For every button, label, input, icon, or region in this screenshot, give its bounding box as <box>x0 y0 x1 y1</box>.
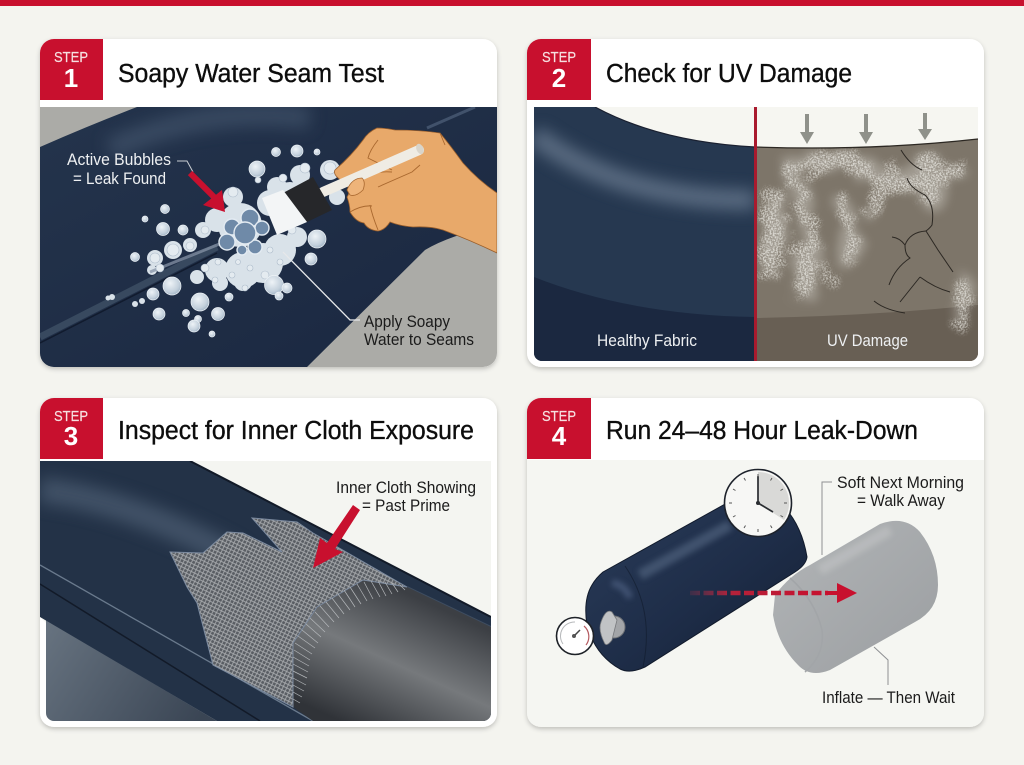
step 3 badge: 3 <box>64 421 78 451</box>
inflated blue cylinder <box>586 495 807 671</box>
label: healthy fabric: Healthy Fabric <box>597 332 697 350</box>
callout: apply soapy water <box>364 313 474 349</box>
red divider <box>754 107 757 361</box>
panel: step 2 uv damage <box>527 39 984 367</box>
callout: active bubbles: Active Bubbles <box>67 151 171 169</box>
label: uv damage: UV Damage <box>827 332 908 350</box>
callout: soft next morning: Soft Next Morning <box>837 474 964 492</box>
step 4 badge <box>527 398 591 459</box>
healthy fabric swatch <box>534 107 755 361</box>
valve <box>600 611 625 645</box>
heading step 4: Run 24–48 Hour Leak-Down <box>606 417 918 445</box>
soft faded cylinder <box>773 521 938 673</box>
exposed inner tube <box>293 580 491 721</box>
callout: apply soapy water: Apply Soapy <box>364 313 451 331</box>
red arrow to cloth <box>313 505 360 568</box>
leader lines <box>822 482 888 685</box>
callout: inner cloth showing: = Past Prime <box>362 497 450 515</box>
pressure gauge <box>556 618 594 654</box>
panel: step 4 leak-down <box>527 398 984 727</box>
top accent bar <box>0 0 1024 6</box>
step 3 badge <box>40 398 103 459</box>
clock <box>724 470 792 536</box>
step 3 badge: STEP <box>54 409 88 425</box>
panel: step 1 soapy water seam test <box>40 39 497 367</box>
dashed red arrow <box>690 583 857 603</box>
callout: soft next morning <box>837 474 964 510</box>
hand with foam brush <box>262 128 497 253</box>
illustration: soapy seam <box>40 107 497 367</box>
red arrow to bubbles <box>177 161 225 212</box>
exposed cloth mesh <box>170 518 407 707</box>
step 2 badge: 2 <box>552 63 566 93</box>
callout: apply soapy water: Water to Seams <box>364 331 474 349</box>
callout: inflate then wait: Inflate — Then Wait <box>822 689 955 707</box>
surface cracks <box>874 150 953 313</box>
uv damaged swatch <box>755 139 978 361</box>
heading step 1: Soapy Water Seam Test <box>118 60 384 88</box>
panel: step 3 inner cloth <box>40 398 497 727</box>
step 4 badge: STEP <box>542 409 576 425</box>
header band <box>527 398 984 460</box>
step 1 badge <box>40 39 103 100</box>
heading step 3: Inspect for Inner Cloth Exposure <box>118 417 474 445</box>
callout: soft next morning: = Walk Away <box>857 492 946 510</box>
step 1 badge: 1 <box>64 63 78 93</box>
illustration: worn tube <box>40 461 491 721</box>
callout: inner cloth showing: Inner Cloth Showing <box>336 479 476 497</box>
heading step 2: Check for UV Damage <box>606 60 852 88</box>
callout: active bubbles: = Leak Found <box>73 170 166 188</box>
step 1 badge: STEP <box>54 50 88 66</box>
uv arrows <box>800 113 932 144</box>
leader line to seams <box>283 252 360 320</box>
step 2 badge: STEP <box>542 50 576 66</box>
soap foam <box>106 145 345 337</box>
step 4 badge: 4 <box>552 421 567 451</box>
step 2 badge <box>527 39 591 100</box>
illustration: fabric comparison <box>534 107 978 361</box>
callout: inner cloth showing <box>336 479 476 515</box>
callout: active bubbles <box>67 151 171 188</box>
frayed threads <box>293 581 405 703</box>
